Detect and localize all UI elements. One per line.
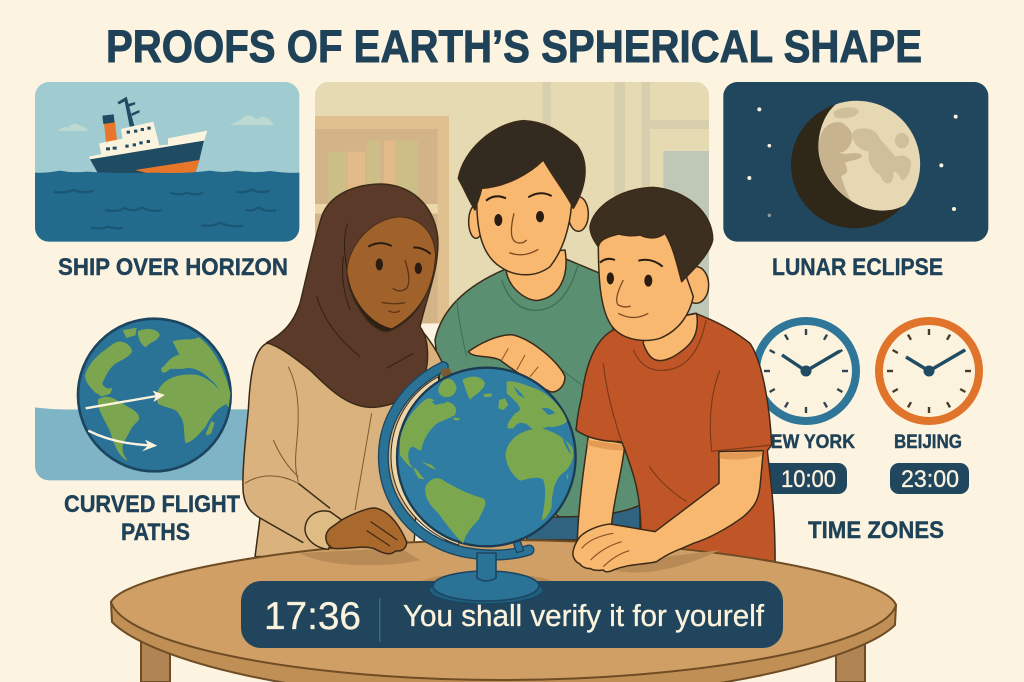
title: PROOFS OF EARTH’S SPHERICAL SHAPE: [106, 21, 922, 72]
panel: lunar eclipse: [723, 82, 988, 242]
label: lunar eclipse: LUNAR ECLIPSE: [772, 254, 943, 281]
people group: [243, 121, 775, 577]
person: boy in red shirt: [576, 187, 775, 577]
label: Beijing: BEIJING: [894, 432, 962, 453]
hands on table: [305, 451, 763, 572]
panel: ship over horizon: [35, 82, 299, 242]
caption bar: [241, 581, 783, 648]
caption text: You shall verify it for yourelf: [403, 598, 764, 633]
hand: woman: [305, 508, 407, 554]
globe on stand: [383, 367, 576, 555]
icon: earth with flight arrows: [78, 319, 231, 471]
time pill: 23:00: [890, 463, 969, 494]
time pill: 10:00: [760, 463, 847, 494]
arm and hand: boy: [573, 451, 763, 572]
scene background: room: [315, 82, 709, 323]
person: boy in green shirt: [435, 121, 643, 540]
time stamp: 17:36: [264, 595, 361, 638]
hand: pointing: [468, 335, 565, 392]
globe base: [429, 553, 543, 604]
icon: stars: [747, 107, 958, 217]
label: curved flight paths: CURVED FLIGHT: [64, 491, 240, 518]
person: woman in hijab: [243, 184, 443, 557]
time pill: 10:00: 10:00: [781, 466, 836, 493]
label: time zones: TIME ZONES: [808, 517, 944, 544]
label: New York: NEW YORK: [758, 432, 855, 453]
icon: eclipsed moon: [791, 101, 920, 228]
label: ship over horizon: SHIP OVER HORIZON: [58, 254, 288, 281]
clock: Beijing: [879, 321, 979, 421]
label: curved flight paths: PATHS: [121, 519, 190, 546]
clock: New York: [756, 321, 856, 421]
time pill: 23:00: 23:00: [901, 466, 959, 493]
icon: ship: [89, 97, 207, 175]
label: curved flight paths: [64, 491, 240, 546]
panel: time zones: [756, 321, 979, 544]
table: [111, 540, 896, 682]
panel: curved flight paths: [35, 319, 253, 480]
